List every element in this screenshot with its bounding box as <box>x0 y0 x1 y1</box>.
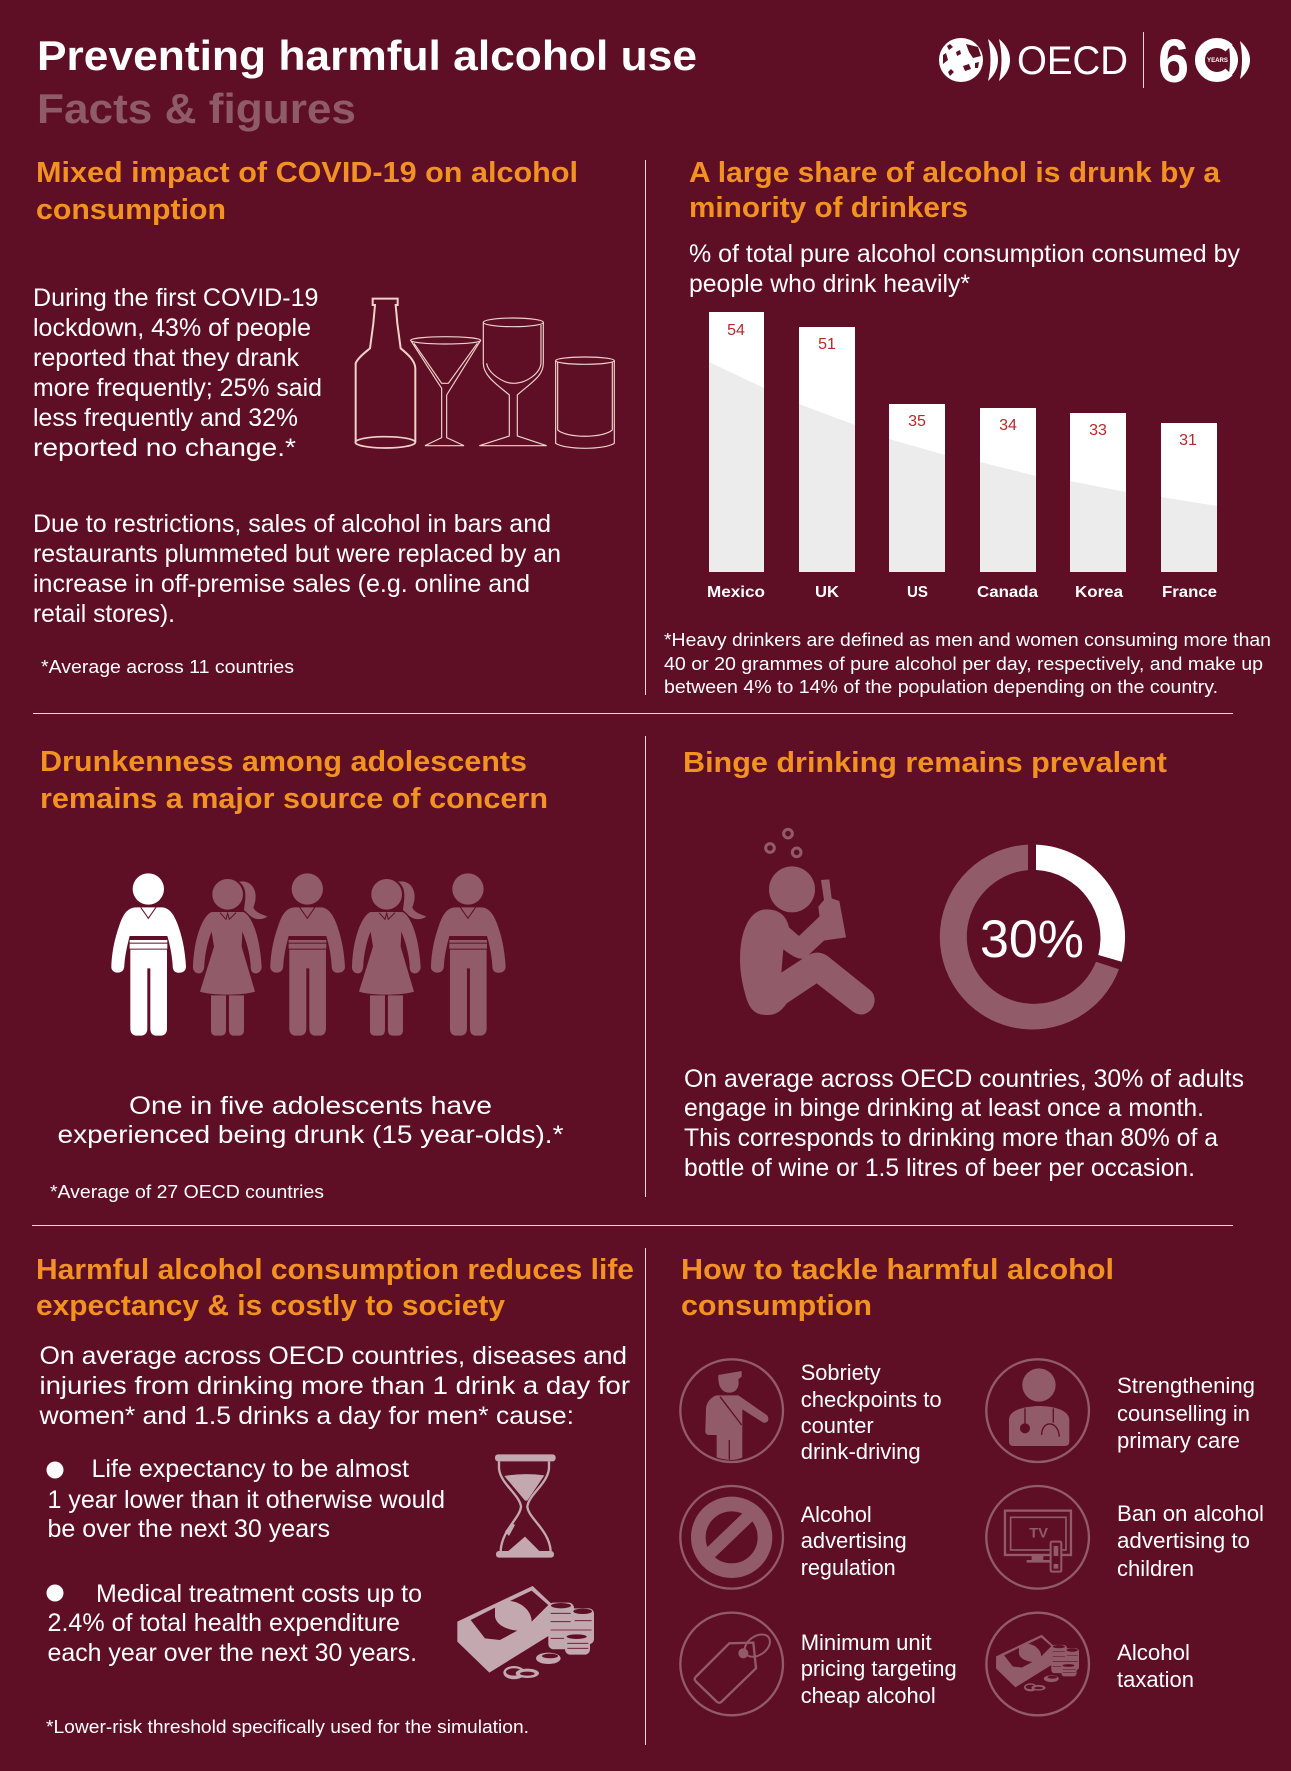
panel: binge drinking <box>683 747 1244 1182</box>
text: sobriety checkpoints: Sobriety <box>801 1360 881 1385</box>
text: diseases and injuries <box>38 1342 630 1430</box>
text: sales shift: increase in off-premise sales (e.g. online and <box>33 570 530 598</box>
text: advertising regulation <box>801 1502 907 1580</box>
OECD 60 years logo: OECD <box>1017 39 1128 83</box>
text: diseases and injuries: On average across OECD countries, diseases and <box>40 1342 627 1370</box>
text: advertising regulation: regulation <box>801 1555 896 1580</box>
bar: Mexico: 54 <box>727 322 745 339</box>
bar: Canada: 34 <box>999 417 1017 434</box>
text: one in five: experienced being drunk (15 year-olds).* <box>58 1121 564 1149</box>
text: binge drinking description: This corresponds to drinking more than 80% of a <box>684 1124 1218 1152</box>
text: ban on advertising: advertising to <box>1117 1528 1250 1553</box>
bar: UK <box>799 327 855 601</box>
bullet: life expectancy: Life expectancy to be almost <box>92 1455 409 1483</box>
text: advertising regulation: Alcohol <box>801 1502 872 1527</box>
text: sales shift <box>33 510 561 628</box>
heading: COVID-19: Mixed impact of COVID-19 on alcohol <box>36 157 578 189</box>
text: binge drinking description: engage in binge drinking at least once a month. <box>684 1094 1204 1122</box>
text: counselling: counselling in <box>1117 1401 1250 1426</box>
icon: bottle and glasses <box>355 299 614 448</box>
bullet: medical costs: Medical treatment costs up to <box>96 1580 422 1608</box>
text: one in five <box>58 1092 564 1149</box>
bar: Mexico: Mexico <box>707 584 765 601</box>
text: ban on advertising: children <box>1117 1556 1194 1581</box>
text: minimum unit pricing: Minimum unit <box>801 1630 932 1655</box>
bar: UK: UK <box>815 584 839 601</box>
chart subtitle: people who drink heavily* <box>689 270 970 298</box>
icon: police officer <box>680 1359 783 1462</box>
text: sobriety checkpoints <box>801 1360 942 1464</box>
bar chart <box>707 312 1217 601</box>
text: sales shift: retail stores). <box>33 600 175 628</box>
text: ban on advertising: Ban on alcohol <box>1117 1501 1264 1526</box>
title <box>37 32 697 132</box>
heading: how to tackle: consumption <box>681 1290 872 1322</box>
bullet: medical costs: 2.4% of total health expenditure <box>48 1609 400 1637</box>
heading: COVID-19: consumption <box>36 194 226 226</box>
text: lockdown drinking: lockdown, 43% of people <box>33 314 311 342</box>
icon: drunk person with bottle <box>740 829 875 1015</box>
text: diseases and injuries: women* and 1.5 drinks a day for men* cause: <box>38 1402 574 1430</box>
donut chart: 30% <box>940 845 1125 1029</box>
text: counselling <box>1117 1373 1255 1453</box>
text: lockdown drinking: During the first COVID-19 <box>33 284 318 312</box>
bullet: medical costs: each year over the next 30 years. <box>48 1639 417 1667</box>
bar: UK: 51 <box>818 336 836 353</box>
icon: prohibition sign <box>680 1486 783 1589</box>
bar: US <box>889 404 945 601</box>
chart subtitle: % of total pure alcohol consumption consumed by <box>689 240 1240 268</box>
icon: doctor <box>986 1359 1089 1462</box>
bar: Korea <box>1070 413 1126 601</box>
bar: France <box>1161 423 1217 601</box>
title: Facts & figures <box>37 85 356 132</box>
bullet: medical costs <box>46 1580 422 1667</box>
text: advertising regulation: advertising <box>801 1528 907 1553</box>
heading: share of alcohol: A large share of alcohol is drunk by a <box>689 157 1221 189</box>
icon: five adolescents <box>111 873 506 1036</box>
text: lockdown drinking: reported that they drank <box>33 344 299 372</box>
heading: harmful consumption <box>36 1254 634 1322</box>
panel: how to tackle <box>680 1254 1264 1715</box>
bar: France: 31 <box>1179 432 1197 449</box>
text: minimum unit pricing: cheap alcohol <box>801 1683 936 1708</box>
icon: money and coins <box>457 1586 594 1679</box>
panel: heavy drinkers <box>664 157 1271 697</box>
OECD 60 years logo <box>939 27 1250 95</box>
text: diseases and injuries: injuries from drinking more than 1 drink a day for <box>40 1372 630 1400</box>
icon: hourglass <box>495 1454 556 1558</box>
bar: Korea: 33 <box>1089 422 1107 439</box>
text: minimum unit pricing <box>801 1630 957 1708</box>
panel: adolescents <box>40 746 564 1202</box>
text: lockdown drinking: reported no change.* <box>33 434 296 462</box>
icon: price tag <box>680 1613 783 1715</box>
text: binge drinking description <box>684 1065 1244 1182</box>
heading: how to tackle <box>681 1254 1114 1322</box>
footnote: 27 countries: *Average of 27 OECD countries <box>50 1182 324 1202</box>
text: sobriety checkpoints: drink-driving <box>801 1439 921 1464</box>
text: sobriety checkpoints: counter <box>801 1413 874 1438</box>
footnote: heavy drinkers definition: between 4% to 14% of the population depending on the country. <box>664 677 1218 697</box>
donut chart: 30%: 30% <box>980 910 1084 969</box>
bar: Canada: Canada <box>977 584 1038 601</box>
text: binge drinking description: bottle of wine or 1.5 litres of beer per occasion. <box>684 1154 1195 1182</box>
text: binge drinking description: On average across OECD countries, 30% of adults <box>684 1065 1244 1093</box>
heading: share of alcohol <box>689 157 1221 224</box>
heading: share of alcohol: minority of drinkers <box>689 192 968 224</box>
text: sales shift: restaurants plummeted but were replaced by an <box>33 540 561 568</box>
panel: COVID-19 impact <box>33 157 614 677</box>
chart subtitle <box>689 240 1240 298</box>
panel: life expectancy and cost <box>36 1254 634 1737</box>
bullet: life expectancy <box>46 1455 445 1543</box>
text: sales shift: Due to restrictions, sales of alcohol in bars and <box>33 510 551 538</box>
bar: France: France <box>1162 584 1217 601</box>
OECD 60 years logo: YEARS <box>1207 57 1229 64</box>
heading: binge drinking: Binge drinking remains prevalent <box>683 747 1167 779</box>
heading: how to tackle: How to tackle harmful alcohol <box>681 1254 1114 1286</box>
text: lockdown drinking <box>33 284 322 462</box>
heading: harmful consumption: expectancy & is costly to society <box>36 1290 505 1322</box>
text: minimum unit pricing: pricing targeting <box>801 1656 957 1681</box>
icon: television: TV <box>1029 1524 1049 1540</box>
footnote: heavy drinkers definition <box>664 630 1271 697</box>
bar: US: 35 <box>908 413 926 430</box>
text: counselling: primary care <box>1117 1428 1240 1453</box>
title: Preventing harmful alcohol use <box>37 32 697 79</box>
footnote: heavy drinkers definition: 40 or 20 grammes of pure alcohol per day, respectively, and make up <box>664 654 1263 674</box>
text: counselling: Strengthening <box>1117 1373 1255 1398</box>
bullet: life expectancy: be over the next 30 years <box>48 1515 330 1543</box>
text: alcohol taxation <box>1117 1640 1194 1692</box>
heading: drunkenness: Drunkenness among adolescents <box>40 746 527 778</box>
OECD 60 years logo: 6 <box>1158 27 1189 95</box>
icon: taxation money <box>986 1613 1089 1715</box>
bar: US: US <box>907 584 928 601</box>
heading: drunkenness: remains a major source of concern <box>40 783 548 815</box>
footnote: heavy drinkers definition: *Heavy drinkers are defined as men and women consuming more than <box>664 630 1271 650</box>
text: ban on advertising <box>1117 1501 1264 1581</box>
footnote: lower-risk threshold: *Lower-risk threshold specifically used for the simulation. <box>46 1717 529 1737</box>
footnote: 11 countries: *Average across 11 countries <box>41 657 294 677</box>
bar: Korea: Korea <box>1075 584 1123 601</box>
text: alcohol taxation: taxation <box>1117 1667 1194 1692</box>
text: one in five: One in five adolescents have <box>129 1092 492 1120</box>
heading: drunkenness <box>40 746 548 815</box>
heading: harmful consumption: Harmful alcohol consumption reduces life <box>36 1254 634 1286</box>
heading: COVID-19 <box>36 157 578 226</box>
bar: Canada <box>977 408 1038 601</box>
text: lockdown drinking: more frequently; 25% said <box>33 374 322 402</box>
icon: television <box>986 1486 1089 1589</box>
text: alcohol taxation: Alcohol <box>1117 1640 1190 1665</box>
bullet: life expectancy: 1 year lower than it otherwise would <box>48 1486 445 1514</box>
text: lockdown drinking: less frequently and 32% <box>33 404 298 432</box>
text: sobriety checkpoints: checkpoints to <box>801 1387 942 1412</box>
bar: Mexico <box>707 312 765 601</box>
